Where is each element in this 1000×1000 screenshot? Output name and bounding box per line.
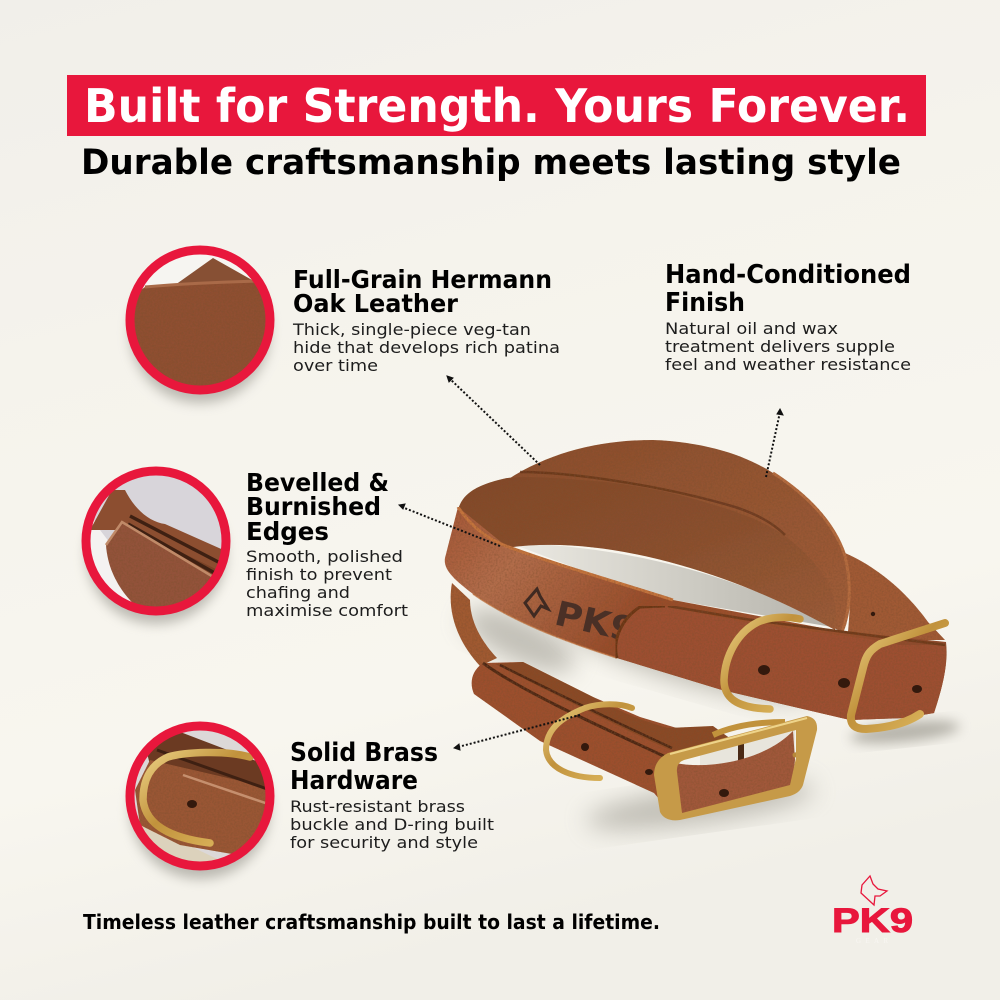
- arrow: to finish: [766, 409, 783, 477]
- collar photo: [445, 440, 961, 839]
- body: bevelled edges: Smooth, polished: [246, 547, 403, 566]
- body: full-grain leather: hide that develops rich patina: [293, 338, 560, 357]
- icon: dog head: [861, 876, 887, 905]
- body: hand-conditioned finish: treatment delivers supple: [665, 337, 895, 356]
- body: bevelled edges: maximise comfort: [246, 601, 408, 620]
- heading: solid brass hardware: Solid Brass: [290, 738, 438, 768]
- body: bevelled edges: finish to prevent: [246, 565, 392, 584]
- body: solid brass hardware: Rust-resistant brass: [290, 797, 465, 816]
- body: bevelled edges: [246, 547, 408, 620]
- callout: solid brass hardware: [290, 738, 494, 852]
- body: solid brass hardware: buckle and D-ring built: [290, 815, 494, 834]
- callout: bevelled edges: [246, 468, 408, 620]
- footer tagline: Timeless leather craftsmanship built to last a lifetime.: [83, 910, 660, 934]
- callout: hand-conditioned finish: [665, 260, 911, 374]
- brass hardware: [546, 617, 945, 820]
- arrow: to hardware: [454, 715, 580, 750]
- heading: bevelled edges: Edges: [246, 517, 329, 546]
- circle: leather close-up: [120, 246, 280, 403]
- subtitle: Durable craftsmanship meets lasting style: [81, 143, 901, 183]
- title banner: Built for Strength. Yours Forever.: [84, 79, 910, 133]
- heading: full-grain leather: Oak Leather: [293, 289, 459, 318]
- heading: full-grain leather: [293, 265, 552, 318]
- heading: hand-conditioned finish: Hand-Conditioned: [665, 260, 911, 290]
- heading: full-grain leather: Full-Grain Hermann: [293, 265, 552, 294]
- circle: bevelled edge close-up: [82, 467, 230, 624]
- heading: bevelled edges: [246, 468, 389, 546]
- circle: brass hardware close-up: [126, 722, 280, 879]
- logo: GEAR: [856, 937, 888, 945]
- heading: bevelled edges: Bevelled &: [246, 468, 389, 497]
- body: solid brass hardware: [290, 797, 494, 852]
- lower band holes: [581, 612, 922, 797]
- heading: hand-conditioned finish: [665, 260, 911, 318]
- body: hand-conditioned finish: [665, 319, 911, 374]
- shadow gap inside loop: [510, 543, 832, 627]
- keeper: [616, 606, 946, 720]
- lower collar: [472, 662, 735, 800]
- heading: bevelled edges: Burnished: [246, 492, 381, 521]
- arrow: to leather: [447, 376, 540, 465]
- upper collar front band: [445, 507, 947, 720]
- heading: solid brass hardware: [290, 738, 438, 796]
- arrow: to edges: [399, 504, 500, 546]
- body: bevelled edges: chafing and: [246, 583, 350, 602]
- embossed PK9 mark: [525, 589, 640, 651]
- body: hand-conditioned finish: Natural oil and wax: [665, 319, 838, 338]
- body: full-grain leather: [292, 320, 560, 375]
- body: hand-conditioned finish: feel and weather resistance: [665, 355, 911, 374]
- heading: hand-conditioned finish: Finish: [665, 288, 745, 318]
- heading: solid brass hardware: Hardware: [290, 766, 418, 796]
- body: full-grain leather: over time: [293, 356, 378, 375]
- embossed PK9 mark: PK9: [551, 594, 640, 651]
- callout: full-grain leather: [292, 265, 560, 375]
- logo: [832, 876, 913, 945]
- buckle window: [700, 722, 795, 770]
- logo: PK9: [832, 902, 913, 940]
- body: full-grain leather: Thick, single-piece veg-tan: [292, 320, 531, 339]
- body: solid brass hardware: for security and style: [290, 833, 478, 852]
